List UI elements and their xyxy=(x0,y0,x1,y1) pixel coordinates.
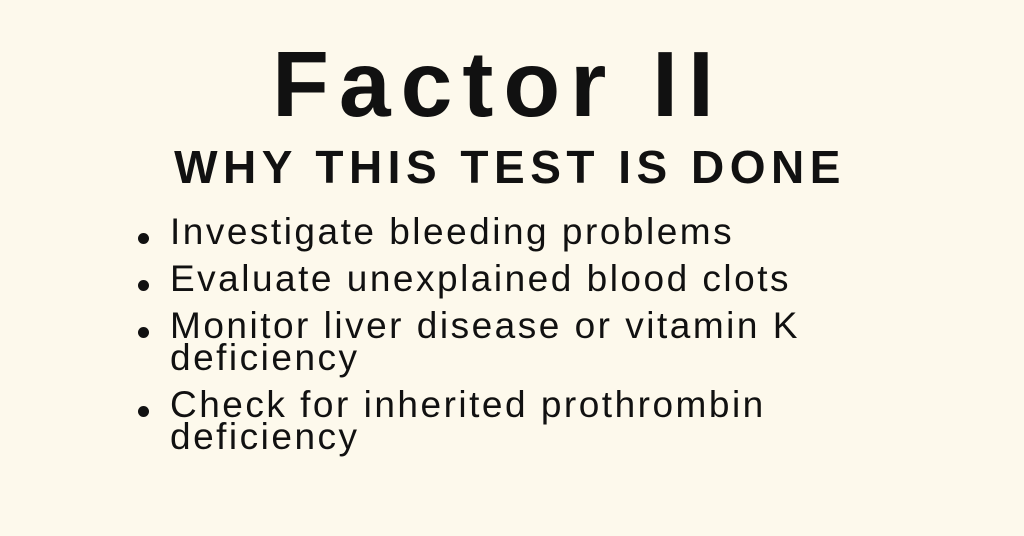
bullet: liver disease: Monitor liver disease or vitamin K xyxy=(170,305,800,346)
bullet: blood clots: Evaluate unexplained blood clots xyxy=(170,258,791,299)
bullet: inherited deficiency xyxy=(138,384,766,457)
bullet: liver disease: deficiency xyxy=(170,337,360,378)
bullet: bleeding problems: Investigate bleeding problems xyxy=(170,211,734,252)
bullet: liver disease xyxy=(138,305,800,378)
bullet: inherited deficiency: deficiency xyxy=(170,416,360,457)
bullet list xyxy=(138,211,800,457)
subtitle: WHY THIS TEST IS DONE xyxy=(174,141,846,193)
title: Factor II xyxy=(272,32,724,136)
bullet: inherited deficiency: Check for inherited prothrombin xyxy=(170,384,766,425)
